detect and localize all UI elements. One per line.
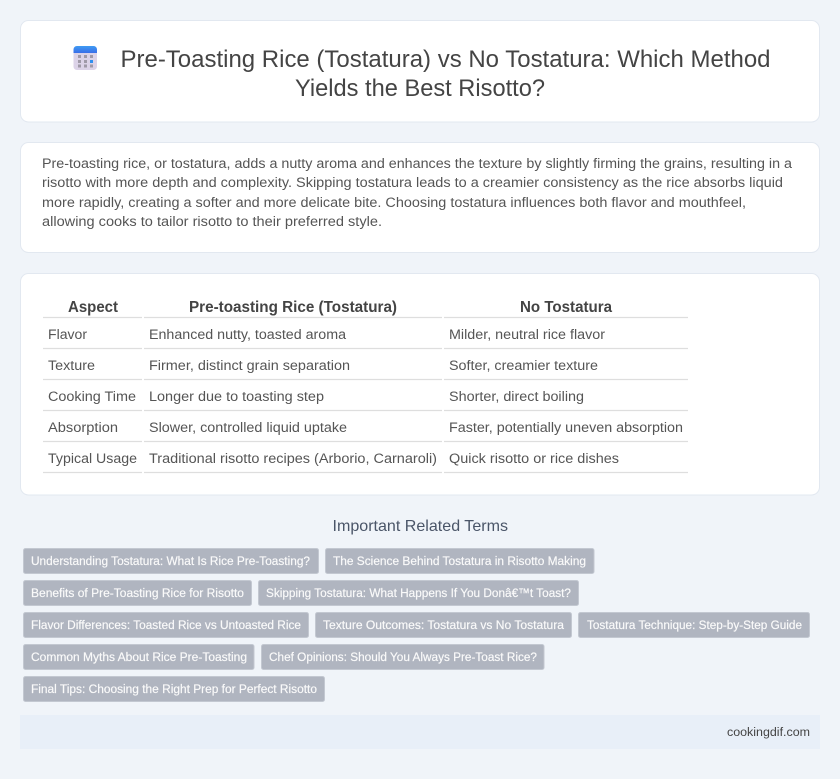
panel: comparison table: [20, 274, 820, 495]
icon: calendar: [74, 46, 97, 70]
tag: common myths: [24, 644, 254, 670]
text block: intro: Pre-toasting rice, or tostatura, adds a nutty aroma and enhances the texture by slightly firming the grains, resulting in a: [42, 156, 792, 172]
footer text: source: cookingdif.com: [727, 725, 810, 739]
table header: Aspect: [68, 299, 118, 316]
table row: cooking time: Shorter, direct boiling: [449, 389, 584, 405]
title: Yields the Best Risotto?: [295, 75, 545, 102]
table row: cooking time: Longer due to toasting step: [149, 389, 324, 405]
text block: intro: [42, 156, 792, 230]
table row: typical usage: Traditional risotto recipes (Arborio, Carnaroli): [149, 451, 437, 467]
table row: flavor: Milder, neutral rice flavor: [449, 327, 605, 343]
table row: flavor: Flavor: [48, 327, 87, 343]
tag: skipping tostatura: Skipping Tostatura: What Happens If You Donâ€™t Toast?: [266, 586, 571, 600]
table row: absorption: [48, 420, 683, 436]
heading: related terms: Important Related Terms: [332, 518, 508, 535]
panel: intro paragraph: [20, 142, 820, 252]
title: [120, 46, 770, 102]
tag: science behind tostatura: The Science Behind Tostatura in Risotto Making: [333, 554, 586, 568]
table row: absorption: Faster, potentially uneven absorption: [449, 420, 683, 436]
table row: cooking time: Cooking Time: [48, 389, 136, 405]
table header: No Tostatura: [520, 299, 612, 316]
tag: technique: Tostatura Technique: Step-by-Step Guide: [587, 618, 802, 632]
tag: flavor differences: [24, 612, 308, 638]
tag: understanding tostatura: [24, 548, 318, 574]
table row: absorption: Slower, controlled liquid uptake: [149, 420, 347, 436]
tag: final tips: [24, 676, 324, 702]
table row: cooking time: [48, 389, 584, 405]
table row: flavor: Enhanced nutty, toasted aroma: [149, 327, 346, 343]
panel: title header: [20, 20, 820, 122]
table header: [68, 299, 612, 316]
tag: common myths: Common Myths About Rice Pre-Toasting: [31, 650, 247, 664]
table row: texture: [48, 358, 598, 374]
tag: benefits: [24, 580, 252, 606]
table row: texture: Texture: [48, 358, 95, 374]
text block: intro: more rapidly, creating a softer and more delicate bite. Choosing tostatura influences both flavor and mouthfeel,: [42, 195, 746, 211]
table row: typical usage: [48, 451, 619, 467]
tag: understanding tostatura: Understanding Tostatura: What Is Rice Pre-Toasting?: [31, 554, 310, 568]
tag: chef opinions: [262, 644, 544, 670]
table row: texture: Firmer, distinct grain separation: [149, 358, 350, 374]
table row: absorption: Absorption: [48, 420, 118, 436]
table row: typical usage: Typical Usage: [48, 451, 137, 467]
text block: intro: allowing cooks to tailor risotto to their preferred style.: [42, 214, 382, 230]
table row: typical usage: Quick risotto or rice dishes: [449, 451, 619, 467]
table header: Pre-toasting Rice (Tostatura): [189, 299, 397, 316]
tag: skipping tostatura: [258, 580, 578, 606]
footer bar: [20, 715, 820, 749]
tag: science behind tostatura: [326, 548, 594, 574]
tag: technique: [578, 612, 810, 638]
table row: texture: Softer, creamier texture: [449, 358, 598, 374]
tag group: related terms: [24, 548, 810, 702]
text block: intro: risotto with more depth and complexity. Skipping tostatura leads to a creamier consistency as the rice absorbs liquid: [42, 175, 783, 191]
tag: chef opinions: Chef Opinions: Should You Always Pre-Toast Rice?: [269, 650, 537, 664]
tag: texture outcomes: [316, 612, 572, 638]
tag: flavor differences: Flavor Differences: Toasted Rice vs Untoasted Rice: [31, 618, 301, 632]
tag: final tips: Final Tips: Choosing the Right Prep for Perfect Risotto: [31, 682, 317, 696]
tag: benefits: Benefits of Pre-Toasting Rice for Risotto: [31, 586, 244, 600]
tag: texture outcomes: Texture Outcomes: Tostatura vs No Tostatura: [323, 618, 564, 632]
table row: flavor: [48, 327, 605, 343]
title: Pre-Toasting Rice (Tostatura) vs No Tostatura: Which Method: [120, 46, 770, 73]
